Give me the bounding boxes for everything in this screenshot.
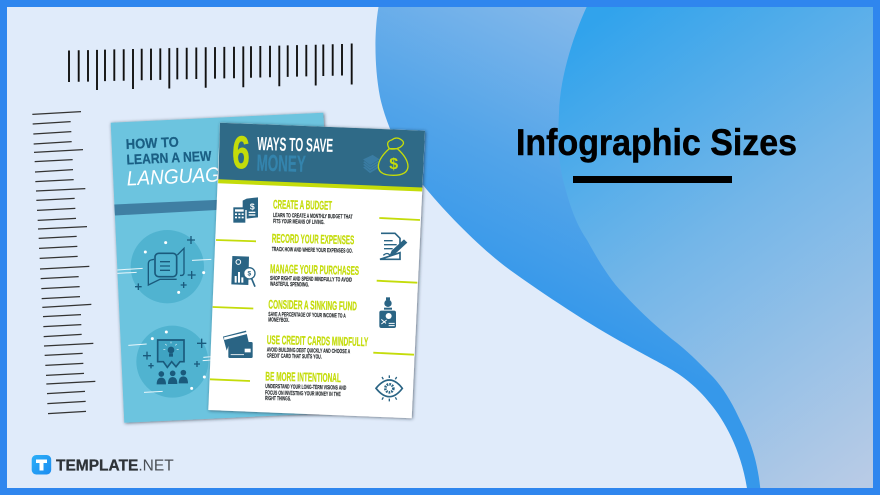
blue wave inner xyxy=(558,0,880,495)
icon: money bag and bills: $ xyxy=(389,156,398,173)
icon: presentation and audience circle xyxy=(128,326,212,398)
item: consider a sinking fund: CONSIDER A SINKING FUND xyxy=(268,298,357,313)
item: use credit cards mindfully: AVOID BUILDING DEBT QUICKLY AND CHOOSE A xyxy=(267,348,351,355)
item: manage your purchases: MANAGE YOUR PURCHASES xyxy=(270,262,359,278)
logo xyxy=(32,455,174,475)
icon: chat bubbles circle xyxy=(117,230,211,303)
back poster heading: HOW TO xyxy=(125,134,179,152)
icon: moneybox jar xyxy=(379,297,396,328)
back poster heading xyxy=(125,134,233,190)
item: be more intentional xyxy=(265,370,347,403)
front poster header xyxy=(218,123,425,188)
item: record your expenses xyxy=(272,232,354,255)
item: use credit cards mindfully: CREDIT CARD THAT SUITS YOU. xyxy=(267,354,322,361)
number six: 6 xyxy=(232,126,250,178)
back poster heading: LEARN A NEW xyxy=(126,148,212,167)
item: be more intentional: RIGHT THINGS. xyxy=(265,396,291,403)
logo wordmark: TEMPLATE.NET xyxy=(56,458,174,475)
item: consider a sinking fund: SAVE A PERCENTAGE OF YOUR INCOME TO A xyxy=(268,312,346,320)
icon: calculator and invoice xyxy=(233,197,258,223)
item: record your expenses: RECORD YOUR EXPENSES xyxy=(272,232,354,247)
item: use credit cards mindfully xyxy=(267,333,369,361)
front poster sheet xyxy=(208,123,425,418)
item: record your expenses: TRACK HOW AND WHERE YOUR EXPENSES GO. xyxy=(272,247,353,255)
item: manage your purchases: WASTEFUL SPENDING. xyxy=(270,282,309,289)
blue wave outer xyxy=(375,0,880,495)
item: use credit cards mindfully: USE CREDIT CARDS MINDFULLY xyxy=(267,333,369,349)
back poster band xyxy=(114,200,226,216)
icon: document and pen xyxy=(380,233,407,259)
item: manage your purchases: SHOP RIGHT AND SPEND MINDFULLY TO AVOID xyxy=(270,276,352,284)
icon: logo badge xyxy=(32,455,51,474)
item: create a budget: FITS YOUR MEANS OF LIVING. xyxy=(273,219,325,226)
vertical ruler ticks xyxy=(32,112,95,414)
lime band xyxy=(218,179,422,192)
item: create a budget xyxy=(273,198,353,226)
icon: calculator and invoice: $ xyxy=(250,201,255,211)
item: consider a sinking fund xyxy=(268,298,357,324)
item: create a budget: LEARN TO CREATE A MONTHLY BUDGET THAT xyxy=(273,213,353,221)
title underline xyxy=(573,176,732,183)
icon: eye with gear xyxy=(376,375,402,401)
item: consider a sinking fund: MONEYBOX. xyxy=(268,318,290,324)
horizontal ruler ticks xyxy=(69,44,352,90)
heading: ways to save: WAYS TO SAVE xyxy=(257,134,333,157)
item: be more intentional: BE MORE INTENTIONAL xyxy=(265,370,341,385)
title: Infographic Sizes xyxy=(516,122,797,163)
icon: report and magnifier xyxy=(231,256,255,287)
item: create a budget: CREATE A BUDGET xyxy=(273,198,332,213)
lime dividers xyxy=(210,218,420,381)
icon: credit cards xyxy=(223,331,253,358)
icon: report and magnifier: $ xyxy=(247,271,251,278)
item: be more intentional: FOCUS ON INVESTING YOUR MONEY IN THE xyxy=(265,391,341,398)
poster: how to learn a new language xyxy=(111,113,337,423)
icon: money bag and bills xyxy=(363,138,408,175)
item: manage your purchases xyxy=(270,262,359,289)
heading: money: MONEY xyxy=(256,150,306,177)
item: be more intentional: UNDERSTAND YOUR LONG-TERM VISIONS AND xyxy=(265,384,347,392)
back poster heading: LANGUAGE xyxy=(126,163,233,190)
back poster sheet xyxy=(111,113,337,423)
poster: 6 ways to save money xyxy=(208,123,425,418)
